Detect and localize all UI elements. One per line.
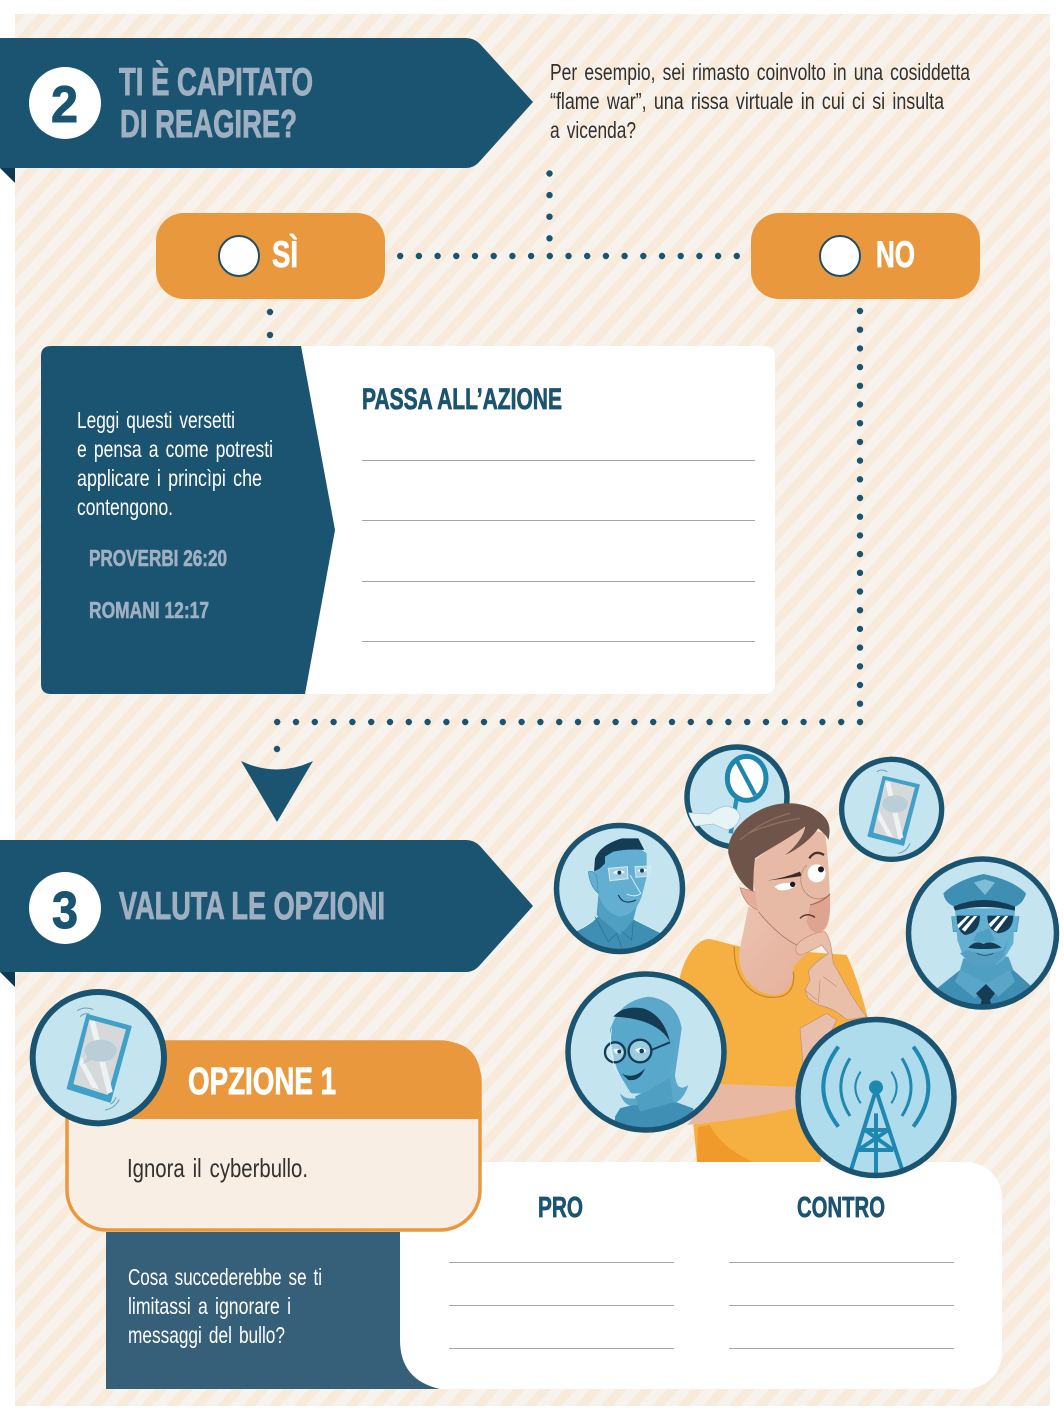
badge number 2 (29, 67, 101, 139)
icon: signal tower (798, 1020, 954, 1176)
badge number 3 (29, 872, 101, 944)
instructions text: e pensa a come potresti (77, 436, 273, 462)
heading: ti è capitato di reagire: DI REAGIRE? (120, 103, 297, 146)
hair (728, 803, 830, 892)
badge number 2: 2 (51, 76, 78, 134)
face (750, 827, 830, 945)
heading: valuta le opzioni: VALUTA LE OPZIONI (119, 885, 385, 928)
question text (128, 1264, 322, 1348)
label: contro: CONTRO (797, 1192, 885, 1224)
icon: phone (842, 759, 942, 859)
heading: ti è capitato di reagire (119, 60, 313, 146)
panel: pro e contro (400, 1162, 1002, 1389)
heading: ti è capitato di reagire: TI È CAPITATO (119, 60, 313, 104)
icon: phone in option 1 (33, 992, 164, 1123)
intro text: a vicenda? (550, 117, 636, 143)
option title: OPZIONE 1 (188, 1061, 336, 1103)
button: sì (156, 213, 385, 299)
illustration: thinking boy with options (556, 747, 1056, 1176)
instructions text: contengono. (77, 494, 173, 520)
character: boy (670, 803, 868, 1162)
heading: passa all'azione: PASSA ALL’AZIONE (362, 383, 562, 416)
panel: passa all'azione (41, 346, 775, 694)
hand at chin (796, 932, 867, 1020)
intro text: “flame war”, una rissa virtuale in cui ci si insulta (550, 88, 944, 114)
scripture references (89, 545, 227, 623)
arm (687, 1084, 800, 1125)
shirt (670, 939, 868, 1162)
neck (739, 907, 823, 995)
section 2 banner (0, 38, 533, 183)
scripture references: ROMANI 12:17 (89, 597, 209, 623)
option 1 card (67, 1041, 481, 1230)
instructions text: Leggi questi versetti (77, 407, 235, 433)
option text: Ignora il cyberbullo. (127, 1153, 308, 1183)
question text: messaggi del bullo? (128, 1322, 285, 1348)
portrait: woman (568, 974, 724, 1132)
portrait: man (556, 826, 682, 953)
label: pro: PRO (538, 1192, 583, 1224)
badge number 3: 3 (52, 882, 78, 940)
ear (740, 888, 760, 911)
eyes (767, 853, 830, 918)
question box (106, 1232, 440, 1389)
intro text (550, 59, 970, 143)
question text: Cosa succederebbe se ti (128, 1264, 322, 1290)
button: sì: SÌ (272, 234, 298, 275)
question text: limitassi a ignorare i (128, 1293, 291, 1319)
arrow down (241, 761, 313, 822)
instructions text (77, 407, 273, 520)
instructions text: applicare i princìpi che (77, 465, 262, 491)
icon: block sign (687, 747, 787, 847)
portrait: police officer (908, 859, 1056, 1010)
button: no: NO (876, 234, 915, 275)
button: no (751, 213, 980, 299)
scripture references: PROVERBI 26:20 (89, 545, 227, 571)
section 3 banner (0, 840, 533, 987)
dotted connectors (270, 174, 860, 750)
